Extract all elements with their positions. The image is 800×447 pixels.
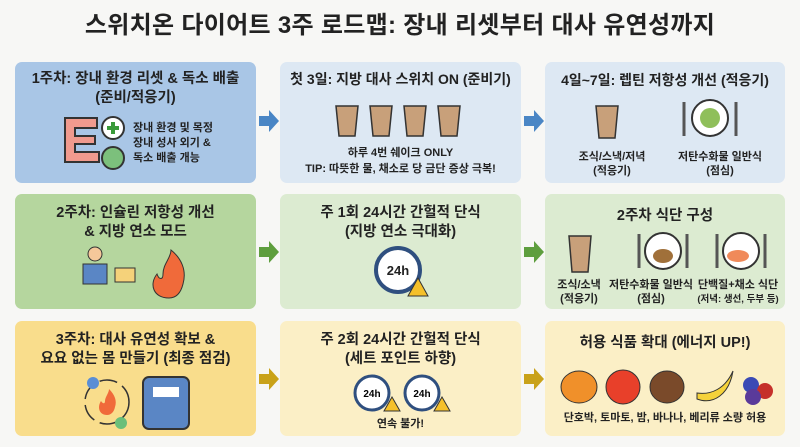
icon: shake and plate <box>595 99 738 139</box>
panel: first 3 days <box>280 62 521 183</box>
panel: week 2: & 지방 연소 모드 <box>84 224 187 240</box>
icon: 24h clock: 24h <box>387 263 409 278</box>
panel: week 2 meals: 단백질+채소 식단 <box>698 279 778 291</box>
panel: allowed foods: 단호박, 토마토, 밤, 바나나, 베리류 소량 허용 <box>564 412 766 424</box>
text: 독소 배출 개능 <box>133 152 200 164</box>
panel: weekly fast: (지방 연소 극대화) <box>345 224 456 240</box>
icon: two clocks: 24h <box>363 389 381 400</box>
panel: days 4-7: 4일~7일: 렙틴 저항성 개선 (적응기) <box>561 72 769 88</box>
panel: twice weekly fast <box>280 321 521 436</box>
panel: week 2 meals: (적응기) <box>560 293 598 305</box>
text <box>133 122 213 164</box>
icon: two clocks <box>354 374 451 412</box>
panel: days 4-7: 조식/스낵/저녁 <box>579 151 645 163</box>
text: 장내 환경 및 목정 <box>133 122 213 134</box>
panel: week 2 <box>15 194 256 309</box>
title: 스위치온 다이어트 3주 로드맵: 장내 리셋부터 대사 유연성까지 <box>85 12 715 39</box>
panel: first 3 days: 첫 3일: 지방 대사 스위치 ON (준비기) <box>290 71 511 87</box>
arrow <box>259 110 279 132</box>
icon: 24h clock <box>374 246 429 296</box>
icon: two clocks: 24h <box>413 389 431 400</box>
panel: weekly fast: 주 1회 24시간 간헐적 단식 <box>320 205 481 221</box>
icon: foods <box>560 370 773 405</box>
panel: week 3: 3주차: 대사 유연성 확보 & <box>56 332 215 348</box>
heading <box>32 70 239 106</box>
panel: allowed foods <box>545 321 785 436</box>
panel: days 4-7: (점심) <box>706 165 734 177</box>
text: 장내 성사 외기 & <box>133 137 211 149</box>
icon: meals <box>568 232 766 273</box>
panel: twice weekly fast: 주 2회 24시간 간헐적 단식 <box>320 332 481 348</box>
panel: week 3 <box>15 321 256 436</box>
heading: 1주차: 장내 환경 리셋 & 독소 배출 <box>32 71 239 87</box>
panel: week 2 meals: 저탄수화물 일반식 <box>609 279 693 291</box>
panel: week 2 meals: (점심) <box>637 293 665 305</box>
panel: week 2 meals: (저녁: 생선, 두부 등) <box>697 294 779 305</box>
panel: week 3: 요요 없는 몸 만들기 (최종 점검) <box>41 351 230 367</box>
icon: person and fire <box>82 246 185 298</box>
panel: days 4-7: 저탄수화물 일반식 <box>678 151 762 163</box>
panel: twice weekly fast: 연속 불가! <box>377 418 424 430</box>
panel: allowed foods: 허용 식품 확대 (에너지 UP!) <box>580 335 750 351</box>
panel: twice weekly fast: (세트 포인트 하향) <box>345 351 456 367</box>
panel: days 4-7: (적응기) <box>593 165 631 177</box>
panel: days 4-7 <box>545 62 785 183</box>
icon: cycle and scale <box>84 376 190 430</box>
icon: intestine <box>64 116 125 170</box>
panel: week 2 meals <box>545 194 785 309</box>
panel: week 2 meals: 2주차 식단 구성 <box>617 208 713 224</box>
panel: week 2 meals: 조식/소낵 <box>557 279 601 291</box>
panel: week 1 <box>15 62 256 183</box>
panel: weekly fast <box>280 194 521 309</box>
panel: week 2: 2주차: 인슐린 저항성 개선 <box>56 205 215 221</box>
heading: (준비/적응기) <box>95 90 176 106</box>
icon: shakes <box>335 105 461 137</box>
panel: first 3 days: TIP: 따뜻한 물, 채소로 당 금단 증상 극복! <box>305 163 496 175</box>
panel: first 3 days: 하루 4번 쉐이크 ONLY <box>348 147 453 159</box>
